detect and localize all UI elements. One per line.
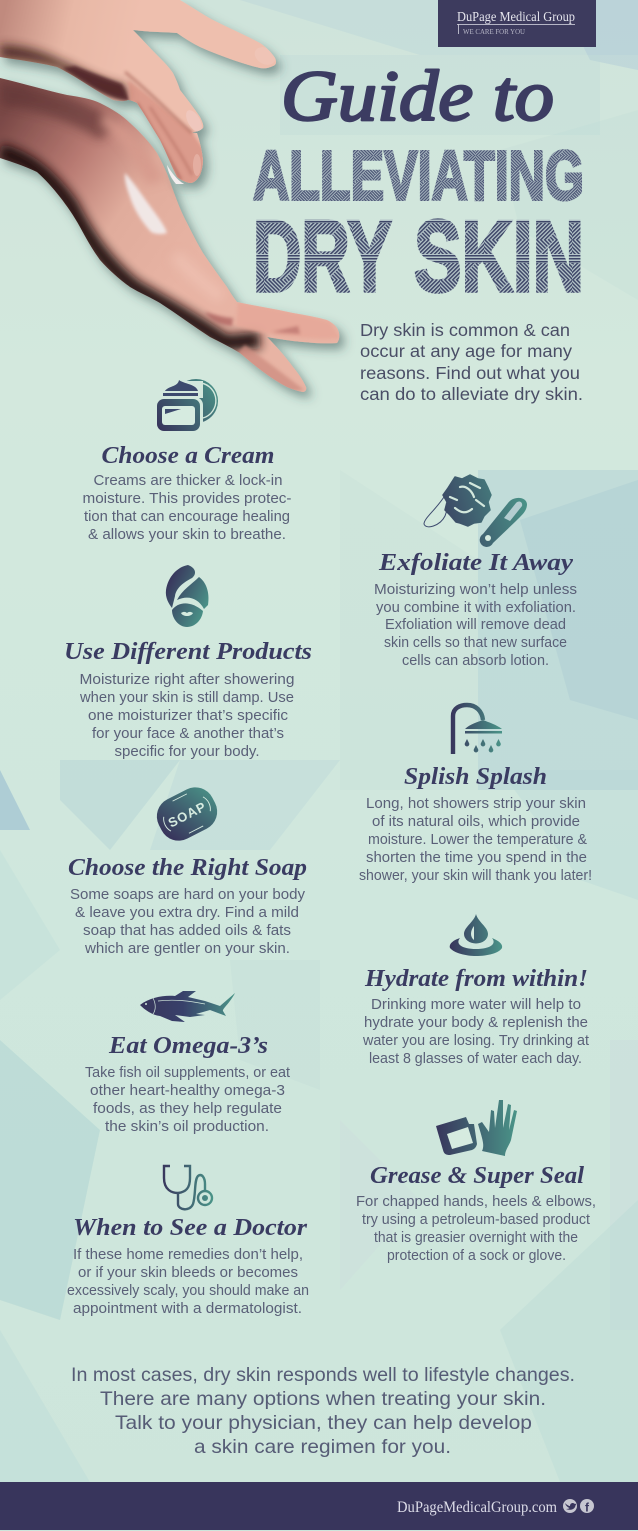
icon: soap bar: [150, 781, 224, 847]
closing statement: There are many options when treating your skin.: [100, 1388, 546, 1410]
body text: Long, hot showers strip your skin: [366, 796, 586, 812]
body text: you combine it with exfoliation.: [376, 600, 576, 616]
body text: for your face & another that’s: [92, 726, 284, 742]
body text: [85, 1065, 290, 1135]
body text: [79, 672, 294, 760]
body text: [374, 582, 577, 669]
body text: hydrate your body & replenish the: [364, 1015, 588, 1031]
intro text: occur at any age for many: [360, 341, 572, 361]
icon: facebook: [580, 1499, 594, 1514]
panel: hydrate from within: [362, 914, 589, 1067]
body text: one moisturizer that’s specific: [88, 708, 288, 724]
body text: Moisturize right after showering: [80, 672, 294, 688]
body text: water you are losing. Try drinking at: [362, 1033, 589, 1049]
body text: Some soaps are hard on your body: [70, 887, 306, 903]
body text: shorten the time you spend in the: [366, 850, 587, 866]
icon: loofah and brush: [424, 475, 527, 547]
body text: Moisturizing won’t help unless: [374, 582, 577, 598]
body text: the skin’s oil production.: [105, 1119, 269, 1135]
closing statement: Talk to your physician, they can help develop: [115, 1412, 532, 1434]
body text: or if your skin bleeds or becomes: [78, 1265, 298, 1281]
body text: excessively scaly, you should make an: [67, 1283, 309, 1299]
heading: Use Different Products: [64, 638, 312, 665]
heading: Splish Splash: [404, 763, 547, 790]
body text: Take fish oil supplements, or eat: [85, 1065, 290, 1081]
body text: [362, 997, 589, 1067]
panel: eat omega-3s: [85, 991, 290, 1135]
body text: skin cells so that new surface: [384, 635, 567, 651]
body text: moisture. Lower the temperature &: [368, 832, 587, 848]
icon: towel turban: [166, 565, 209, 627]
body text: when your skin is still damp. Use: [79, 690, 294, 706]
icon: soap bar: SOAP: [166, 798, 209, 830]
footer bar: DuPageMedicalGroup.com: [397, 1499, 557, 1516]
body text: that is greasier overnight with the: [374, 1230, 578, 1246]
body text: other heart-healthy omega-3: [90, 1083, 285, 1099]
body text: [67, 1247, 309, 1317]
logo box: DuPage Medical Group: [457, 9, 575, 24]
panel: grease and super seal: [356, 1100, 596, 1264]
panel: use different products: [64, 565, 312, 760]
icon: twitter: [563, 1499, 577, 1513]
icon: water drop: [450, 914, 502, 956]
intro text: Dry skin is common & can: [360, 320, 570, 340]
closing statement: [71, 1364, 575, 1458]
body text: appointment with a dermatologist.: [73, 1301, 302, 1317]
title: [253, 56, 584, 313]
heading: Choose the Right Soap: [68, 854, 307, 881]
body text: Drinking more water will help to: [371, 997, 581, 1013]
heading: Exfoliate It Away: [378, 549, 573, 576]
panel: when to see a doctor: [67, 1166, 309, 1317]
intro text: can do to alleviate dry skin.: [360, 384, 583, 404]
body text: least 8 glasses of water each day.: [369, 1051, 582, 1067]
lower hand: [0, 78, 340, 392]
body text: For chapped hands, heels & elbows,: [356, 1194, 596, 1210]
title: Guide to: [281, 56, 554, 136]
intro text: reasons. Find out what you: [360, 363, 580, 383]
icon: shower head: [453, 705, 502, 754]
icon: stethoscope: [164, 1166, 212, 1209]
body text: shower, your skin will thank you later!: [359, 868, 592, 884]
body text: [356, 1194, 596, 1264]
footer bar: [0, 1482, 638, 1530]
heading: Choose a Cream: [102, 442, 274, 469]
heading: Hydrate from within!: [364, 965, 588, 992]
heading: When to See a Doctor: [73, 1214, 307, 1241]
upper hand: [0, 0, 279, 185]
body text: soap that has added oils & fats: [83, 923, 291, 939]
panel: choose the right soap: [68, 781, 307, 957]
body text: & leave you extra dry. Find a mild: [75, 905, 299, 921]
intro text: [360, 320, 583, 404]
body text: Creams are thicker & lock-in: [94, 473, 282, 489]
body text: moisture. This provides protec-: [82, 491, 292, 507]
body text: Exfoliation will remove dead: [385, 617, 566, 633]
panel: exfoliate it away: [374, 475, 577, 669]
icon: cream jar: [155, 379, 218, 433]
body text: specific for your body.: [114, 744, 260, 760]
logo box: [438, 0, 596, 47]
hands photo: [0, 0, 340, 392]
closing statement: In most cases, dry skin responds well to lifestyle changes.: [71, 1364, 575, 1386]
closing statement: a skin care regimen for you.: [194, 1436, 451, 1458]
body text: [359, 796, 592, 884]
logo box: WE CARE FOR YOU: [463, 28, 525, 36]
body text: If these home remedies don’t help,: [73, 1247, 303, 1263]
title: DRY: [253, 201, 392, 313]
body text: tion that can encourage healing: [84, 509, 290, 525]
body text: try using a petroleum-based product: [362, 1212, 590, 1228]
cream: [125, 173, 167, 234]
panel: splish splash: [359, 705, 592, 884]
body text: [82, 473, 292, 543]
body text: & allows your skin to breathe.: [88, 527, 286, 543]
panel: choose a cream: [82, 379, 292, 543]
body text: of its natural oils, which provide: [372, 814, 580, 830]
body text: which are gentler on your skin.: [84, 941, 290, 957]
icon: jar and glove: [436, 1100, 517, 1156]
icon: fish: [140, 991, 235, 1022]
body text: cells can absorb lotion.: [402, 653, 549, 669]
heading: Grease & Super Seal: [370, 1162, 584, 1189]
icon: facebook: f: [585, 1500, 590, 1514]
body text: [70, 887, 306, 957]
body text: protection of a sock or glove.: [387, 1248, 566, 1264]
body text: foods, as they help regulate: [93, 1101, 282, 1117]
heading: Eat Omega-3’s: [108, 1032, 268, 1059]
